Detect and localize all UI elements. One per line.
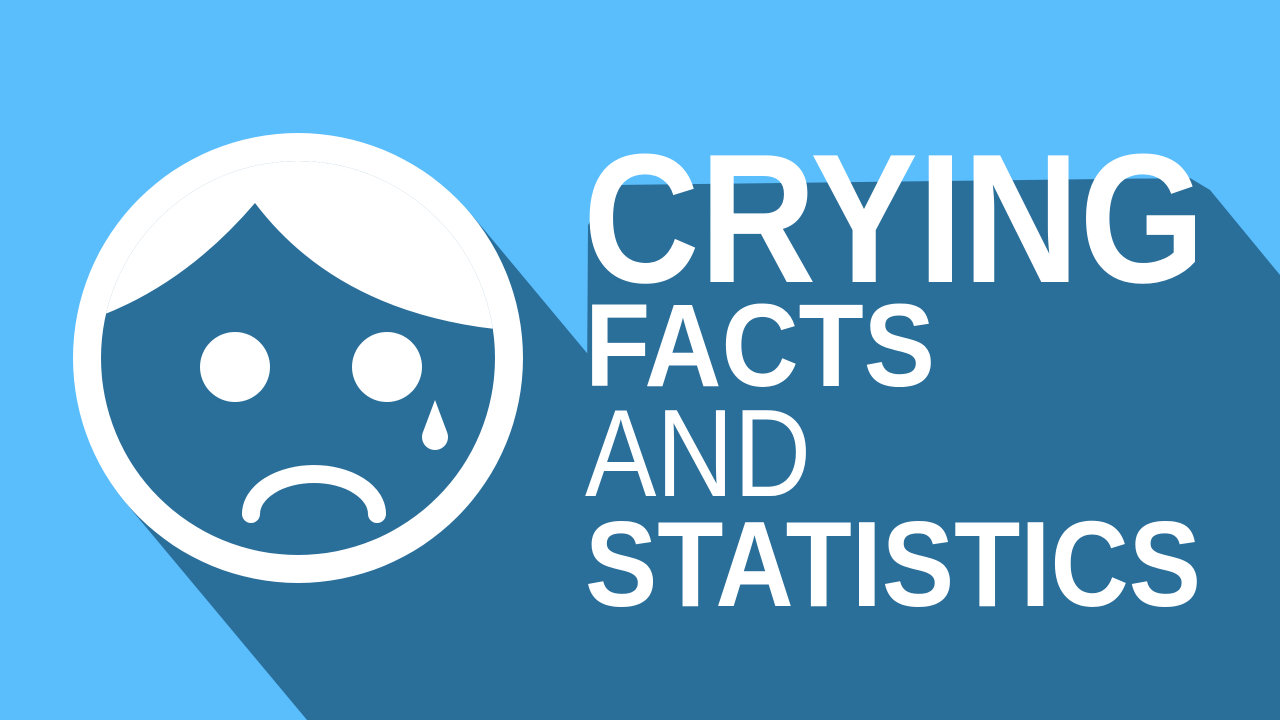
subtitle: AND: AND — [585, 385, 811, 523]
hair — [106, 161, 493, 329]
long shadow: face — [125, 214, 893, 720]
eyes — [200, 332, 270, 402]
infographic canvas — [73, 133, 1280, 720]
subtitle: STATISTICS: STATISTICS — [585, 496, 1201, 632]
title: CRYING: CRYING — [583, 115, 1205, 321]
long shadow: title — [585, 178, 1280, 720]
mouth — [251, 474, 377, 514]
subtitle: FACTS: FACTS — [585, 280, 935, 412]
icon: sad face — [73, 100, 530, 583]
tear drop — [422, 400, 448, 450]
